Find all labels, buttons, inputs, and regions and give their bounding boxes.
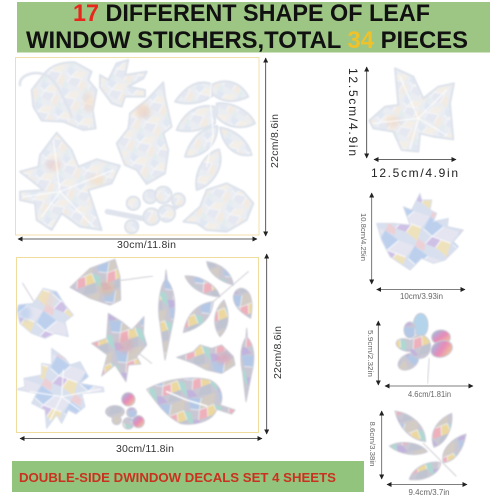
bottom banner [12,461,364,492]
title line 2: WINDOW STICHERS,TOTAL 34 PIECES [26,27,468,54]
panel: sheet 2 with vivid leaves [16,258,258,432]
leaf: big icy maple [17,348,104,428]
bottom banner: DOUBLE-SIDE DWINDOW DECALS SET 4 SHEETS [19,470,336,485]
leaf: centre maple [92,313,152,382]
dimension: sheet 2 width: 30cm/11.8in [116,443,174,455]
leaf: rounded bottom right [183,183,253,232]
leaf: curled stem leaf [20,62,97,130]
leaf: top heart [70,259,153,305]
leaf: small clover [106,393,152,429]
leaf: fern sprig [175,64,255,190]
sample leaf 2: maple with dimensions [359,193,465,301]
title banner [17,0,490,54]
leaf: small palm [100,60,147,107]
leaf: berries [107,187,185,233]
dimension: sheet 2 height: 22cm/8.6in [272,326,284,379]
sample leaf 3: clover with dimensions [366,313,473,399]
sample leaf 1: pale maple with dimensions: 12.5cm/4.9in [371,166,458,180]
sample leaf 3: clover with dimensions: 4.6cm/1.81in [408,389,451,399]
leaf: large round [147,378,235,424]
leaf: left jagged [17,283,73,338]
leaf: small oak [177,345,235,373]
sample leaf 1: pale maple with dimensions: 12.5cm/4.9in [346,68,360,156]
sample leaf 4: spray with dimensions: 9.4cm/3.7in [408,487,450,497]
sample leaf 4: spray with dimensions: 8.6cm/3.38in [368,422,377,466]
sample leaf 2: maple with dimensions: 10.8cm/4.25in [359,213,368,261]
leaf: large maple [20,133,120,230]
leaf: long feather [159,270,175,360]
sample leaf 2: maple with dimensions: 10cm/3.93in [400,291,443,301]
sample leaf 3: clover with dimensions: 5.9cm/2.32in [366,330,375,377]
leaf: compound spray [183,262,252,337]
dimension: sheet 1 width: 30cm/11.8in [117,239,176,251]
sample leaf 1: pale maple with dimensions [346,67,458,180]
dimension: sheet 1 height: 22cm/8.6in [269,114,281,168]
leaf: slim feather right [241,328,254,402]
panel: sheet 1 with pale leaves [16,58,259,235]
leaf: oak centre [117,82,172,184]
sample leaf 4: spray with dimensions [368,411,467,497]
title line 1: 17 DIFFERENT SHAPE OF LEAF [73,0,430,27]
